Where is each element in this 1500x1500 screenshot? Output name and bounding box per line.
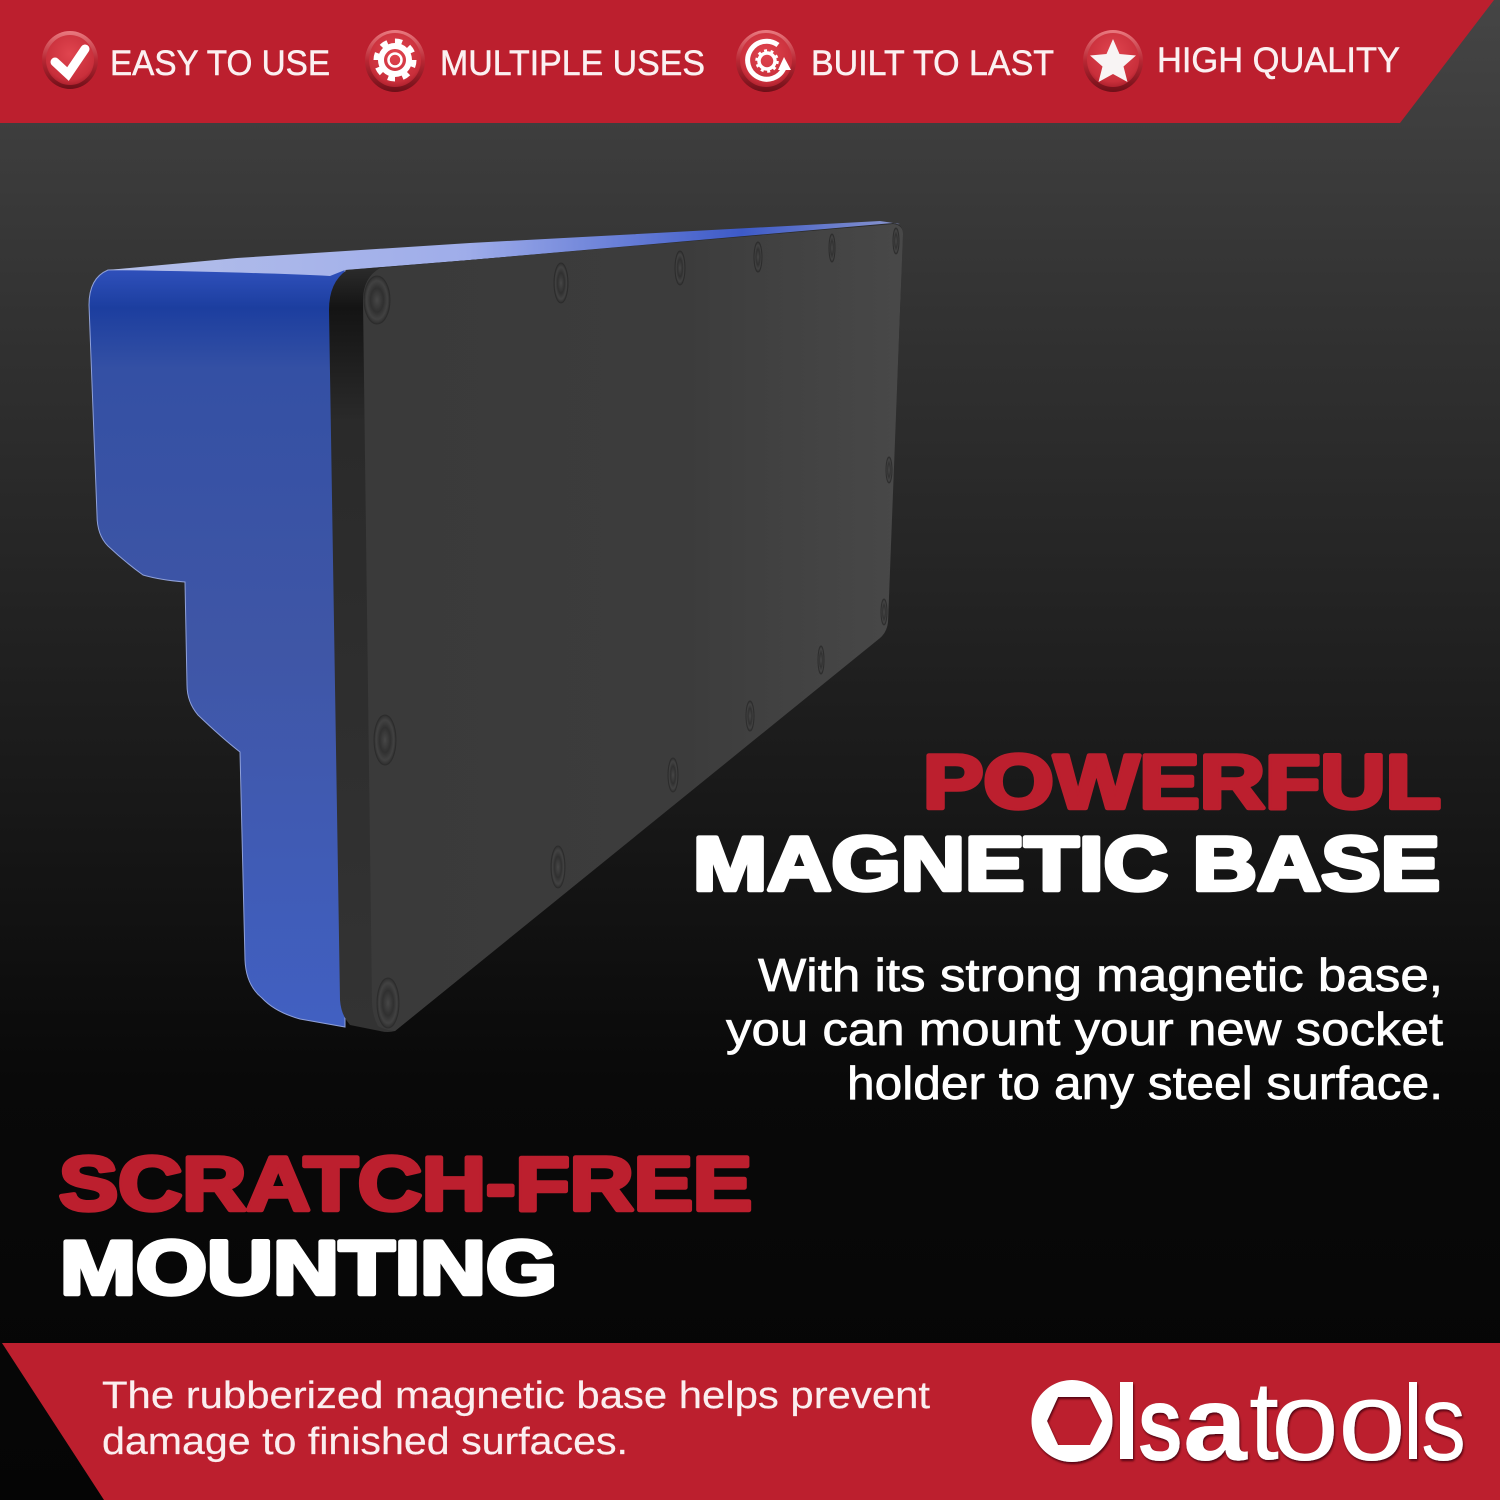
text: scratch-free description (102, 1375, 930, 1463)
heading line: scratch-free: SCRATCH-FREE (59, 1142, 752, 1227)
heading line: powerful: POWERFUL (923, 740, 1441, 825)
logo: olsatools: t (1249, 1358, 1279, 1483)
logo: olsatools: s (1137, 1365, 1183, 1483)
text: scratch-free description: The rubberized magnetic base helps prevent (102, 1375, 930, 1417)
product: magnetic base holder (89, 221, 903, 1032)
top highlight strip (108, 221, 900, 276)
magnet button screws (364, 228, 899, 1028)
label: multiple uses: MULTIPLE USES (440, 44, 705, 83)
label: easy to use: EASY TO USE (110, 44, 330, 83)
logo: olsatools (1032, 1358, 1466, 1484)
icon: cycle gear (736, 30, 796, 92)
logo: olsatools: o (1271, 1359, 1339, 1484)
icon: star (1083, 30, 1143, 92)
heading: powerful magnetic base (693, 740, 1441, 907)
feature: easy to use (42, 31, 330, 89)
heading: scratch-free mounting (59, 1142, 752, 1311)
rubber face (363, 224, 903, 1031)
black bezel (329, 223, 903, 1032)
text: magnetic base description: holder to any steel surface. (847, 1057, 1443, 1109)
text: magnetic base description (726, 949, 1443, 1109)
feature: built to last (736, 30, 1054, 92)
label: high quality: HIGH QUALITY (1157, 41, 1400, 80)
heading line: mounting: MOUNTING (60, 1226, 557, 1311)
text: magnetic base description: you can mount your new socket (726, 1003, 1443, 1055)
icon: gear (365, 30, 425, 92)
text: magnetic base description: With its strong magnetic base, (758, 949, 1443, 1001)
feature: multiple uses (365, 30, 705, 92)
feature: high quality (1083, 30, 1400, 92)
logo: olsatools: o (1338, 1359, 1406, 1484)
text: scratch-free description: damage to finished surfaces. (102, 1421, 628, 1463)
logo: olsatools: s (1421, 1362, 1466, 1483)
blue side body (89, 266, 345, 1027)
logo: olsatools: a (1183, 1365, 1248, 1483)
bottom banner (2, 1343, 1500, 1500)
top banner (0, 0, 1494, 123)
heading line: magnetic base: MAGNETIC BASE (693, 822, 1440, 907)
label: built to last: BUILT TO LAST (811, 44, 1054, 83)
icon: check mark (42, 31, 98, 89)
